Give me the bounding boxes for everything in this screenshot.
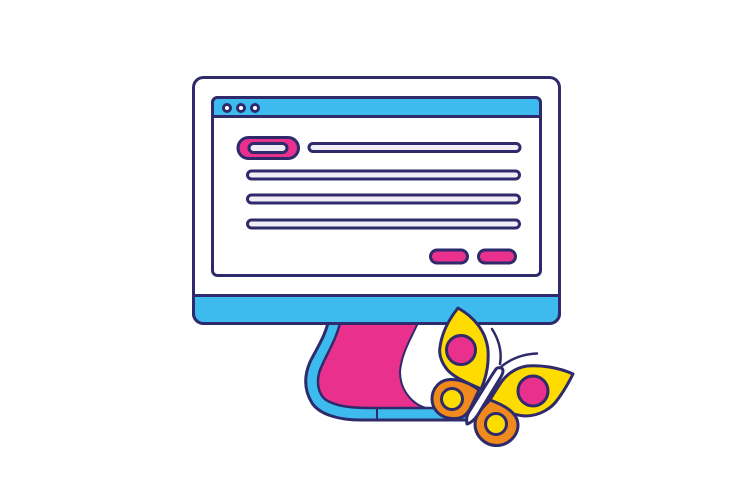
upper left wing	[440, 308, 488, 389]
browser title bar	[212, 98, 540, 116]
lower right wing spot	[486, 414, 506, 434]
window control dots	[224, 104, 258, 112]
butterfly	[432, 308, 573, 446]
lower left wing spot	[442, 388, 462, 410]
upper left wing spot	[446, 336, 476, 364]
right wing spot	[518, 376, 548, 406]
right wing	[490, 366, 573, 416]
browser window	[212, 98, 540, 276]
lower right wing	[475, 400, 518, 446]
body	[467, 368, 503, 424]
monitor body	[194, 78, 560, 324]
monitor base band	[194, 296, 560, 324]
lower left wing	[432, 379, 479, 419]
highlighted pink pill	[238, 138, 298, 158]
text lines	[248, 144, 520, 228]
antennae	[492, 329, 537, 366]
monitor stand	[306, 323, 470, 420]
action buttons	[430, 250, 516, 263]
